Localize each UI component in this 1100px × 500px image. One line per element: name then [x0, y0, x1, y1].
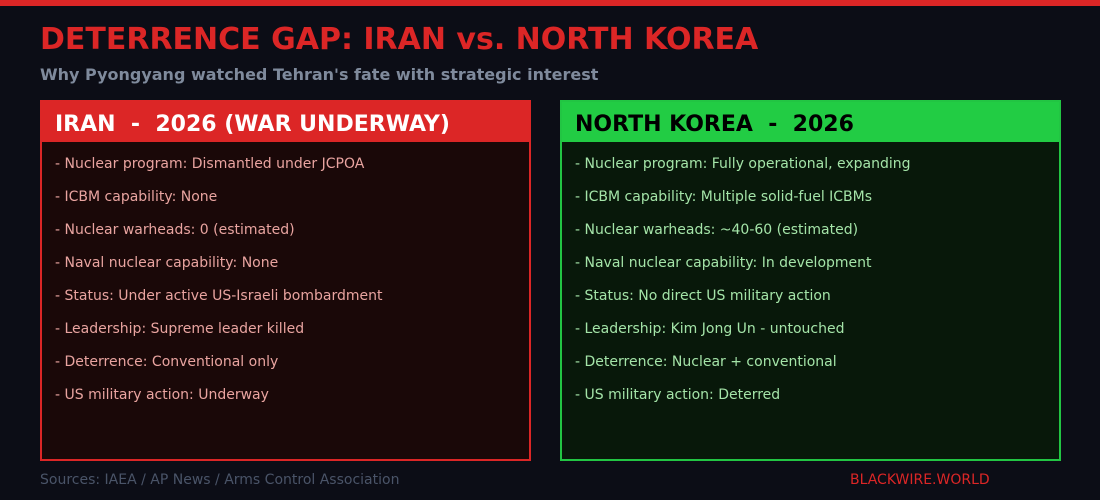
panel: north korea: - Status: No direct US military action [575, 288, 831, 304]
nk header [562, 102, 1059, 142]
nk header: NORTH KOREA - 2026 [575, 112, 854, 137]
iran header [42, 102, 529, 142]
panel: north korea: - ICBM capability: Multiple solid-fuel ICBMs [575, 189, 872, 205]
panel: iran: - US military action: Underway [55, 387, 269, 403]
panel: iran: - Nuclear warheads: 0 (estimated) [55, 222, 295, 238]
panel: iran: - Nuclear program: Dismantled under JCPOA [55, 156, 364, 172]
panel: iran [40, 100, 531, 461]
panel: iran: - Deterrence: Conventional only [55, 354, 278, 370]
panel: iran: - Status: Under active US-Israeli bombardment [55, 288, 382, 304]
panel: north korea: - Nuclear program: Fully operational, expanding [575, 156, 911, 172]
panel: north korea [560, 100, 1061, 461]
panel: north korea: - US military action: Deterred [575, 387, 780, 403]
sources: Sources: IAEA / AP News / Arms Control Association [40, 472, 399, 488]
iran header: IRAN - 2026 (WAR UNDERWAY) [55, 112, 450, 137]
top bar [0, 0, 1100, 6]
nk items [575, 156, 911, 403]
subtitle: Why Pyongyang watched Tehran's fate with strategic interest [40, 65, 598, 84]
title: DETERRENCE GAP: IRAN vs. NORTH KOREA [40, 22, 758, 57]
panel: iran: - ICBM capability: None [55, 189, 217, 205]
iran items [55, 156, 382, 403]
brand: BLACKWIRE.WORLD [850, 472, 990, 488]
panel: iran: - Naval nuclear capability: None [55, 255, 278, 271]
panel: north korea: - Leadership: Kim Jong Un - untouched [575, 321, 844, 337]
panel: north korea: - Naval nuclear capability: In development [575, 255, 872, 271]
panel: iran: - Leadership: Supreme leader killed [55, 321, 304, 337]
panel: north korea: - Nuclear warheads: ~40-60 (estimated) [575, 222, 858, 238]
panel: north korea: - Deterrence: Nuclear + conventional [575, 354, 837, 370]
